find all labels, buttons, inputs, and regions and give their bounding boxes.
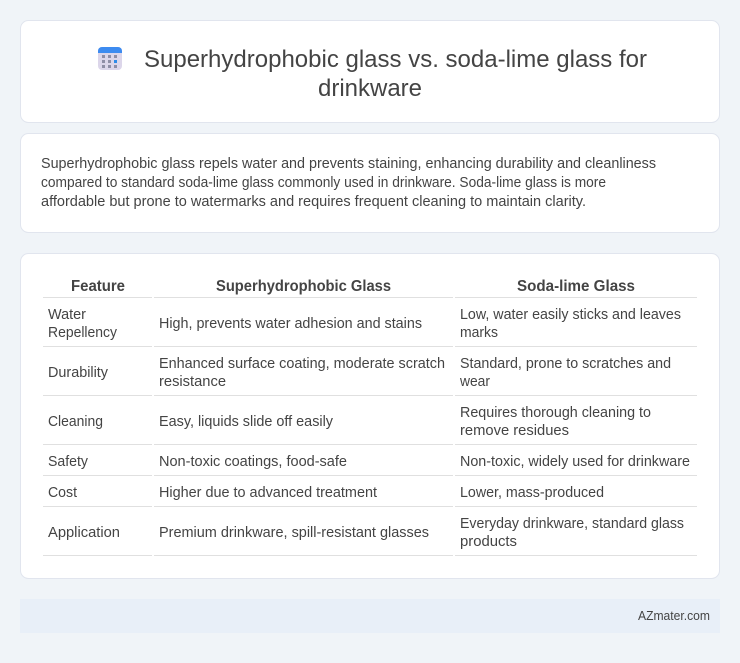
footer bbox=[20, 599, 720, 633]
row: application: Application bbox=[48, 525, 120, 541]
title bbox=[144, 46, 647, 102]
icon: calendar bbox=[98, 47, 122, 70]
table header: Feature bbox=[71, 278, 125, 295]
table header bbox=[71, 278, 635, 295]
row: durability: wear bbox=[459, 374, 490, 390]
intro text: Superhydrophobic glass repels water and prevents staining, enhancing durability and cleanliness bbox=[41, 156, 656, 172]
row: water repellency: Repellency bbox=[48, 325, 118, 341]
row: cleaning bbox=[48, 405, 651, 439]
row: cleaning: Requires thorough cleaning to bbox=[460, 405, 651, 421]
row: cleaning: Easy, liquids slide off easily bbox=[159, 414, 334, 430]
row: durability: Standard, prone to scratches and bbox=[460, 356, 671, 372]
intro text bbox=[41, 156, 656, 210]
panel: title card bbox=[20, 20, 720, 122]
row: safety: Non-toxic, widely used for drinkware bbox=[460, 454, 690, 470]
row: cleaning: remove residues bbox=[460, 423, 569, 439]
row: cost: Higher due to advanced treatment bbox=[159, 485, 377, 501]
row: water repellency: marks bbox=[460, 325, 498, 341]
row: cost: Cost bbox=[48, 485, 77, 501]
row: durability bbox=[48, 356, 671, 390]
row: cost: Lower, mass-produced bbox=[460, 485, 604, 501]
intro text: affordable but prone to watermarks and requires frequent cleaning to maintain clarity. bbox=[41, 194, 586, 210]
panel: comparison table bbox=[20, 254, 720, 578]
title: Superhydrophobic glass vs. soda-lime glass for bbox=[144, 46, 647, 73]
row: application: products bbox=[460, 534, 517, 550]
row: safety bbox=[48, 454, 690, 470]
row: application: Everyday drinkware, standard glass bbox=[460, 516, 684, 532]
row: water repellency: Low, water easily sticks and leaves bbox=[460, 307, 681, 323]
row: safety: Safety bbox=[48, 454, 89, 470]
row: water repellency bbox=[48, 307, 681, 341]
footer: AZmater.com bbox=[638, 608, 710, 623]
panel: introduction bbox=[20, 134, 720, 232]
row: durability: Enhanced surface coating, moderate scratch bbox=[159, 356, 445, 372]
table header: Superhydrophobic Glass bbox=[216, 278, 391, 295]
row: application: Premium drinkware, spill-resistant glasses bbox=[159, 525, 429, 541]
intro text: compared to standard soda-lime glass commonly used in drinkware. Soda-lime glass is more bbox=[41, 175, 606, 191]
row: durability: resistance bbox=[159, 374, 226, 390]
row: cleaning: Cleaning bbox=[48, 414, 103, 430]
row: cost bbox=[48, 485, 604, 501]
row: water repellency: Water bbox=[48, 307, 86, 323]
row: safety: Non-toxic coatings, food-safe bbox=[159, 454, 347, 470]
title: drinkware bbox=[318, 75, 422, 102]
row: application bbox=[48, 516, 684, 550]
table header: Soda-lime Glass bbox=[517, 278, 635, 295]
row: water repellency: High, prevents water adhesion and stains bbox=[159, 316, 422, 332]
row: durability: Durability bbox=[48, 365, 109, 381]
